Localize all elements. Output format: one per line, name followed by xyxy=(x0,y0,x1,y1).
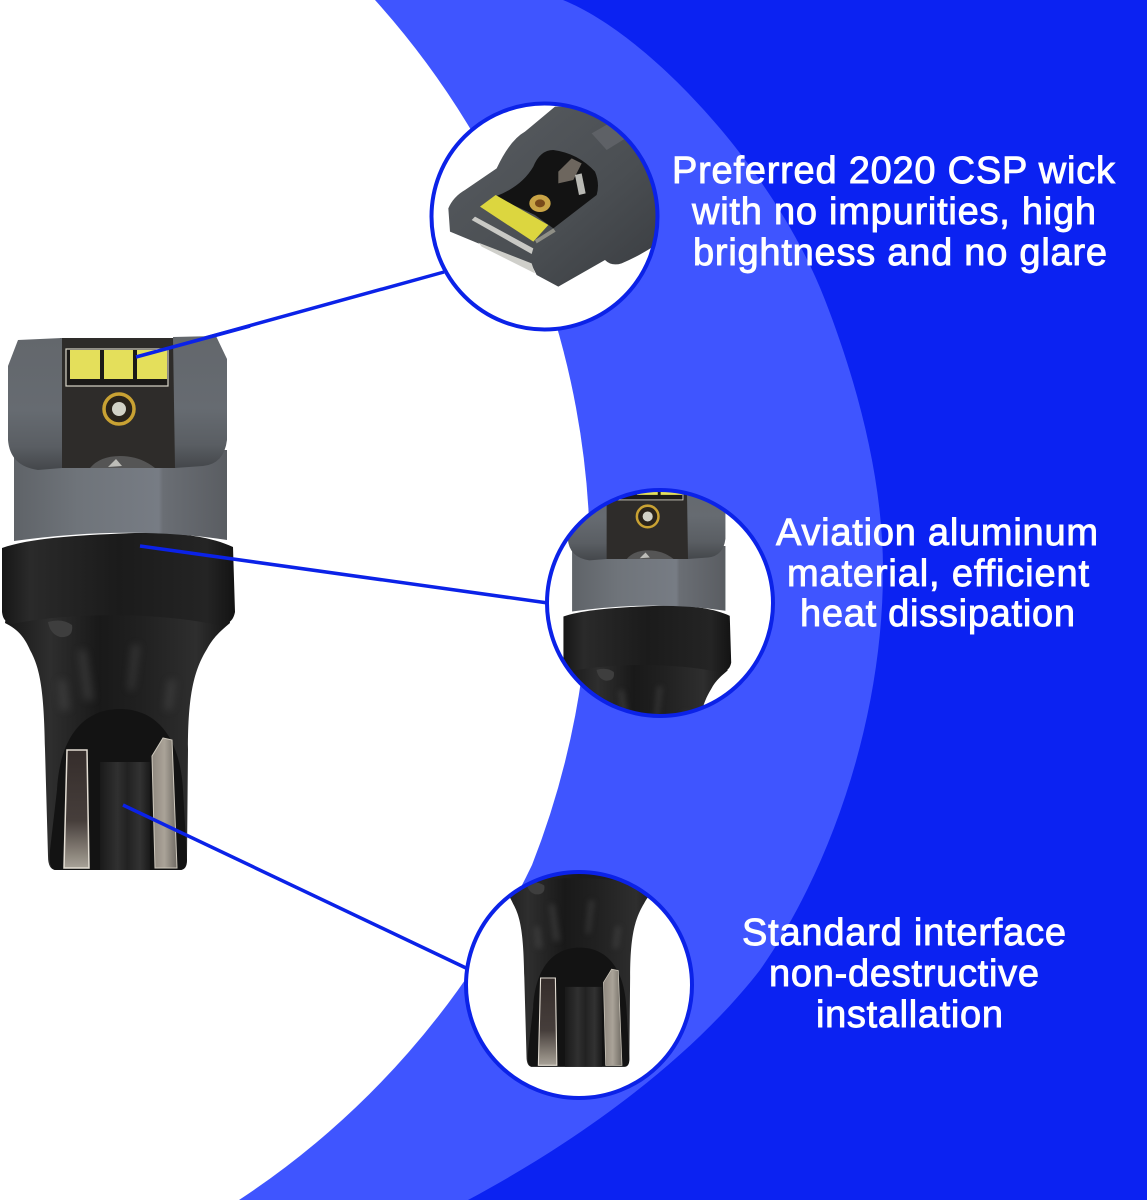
text block: CSP wick: brightness and no glare xyxy=(693,232,1107,274)
callout circle: interface close-up xyxy=(464,870,694,1100)
text block: aviation aluminum: Aviation aluminum xyxy=(776,512,1098,554)
text block: standard interface: non-destructive xyxy=(769,953,1039,995)
text block: CSP wick: Preferred 2020 CSP wick xyxy=(672,150,1116,192)
main bulb photo xyxy=(2,336,235,870)
callout circle: aluminum body close-up xyxy=(545,488,775,718)
text block: standard interface: installation xyxy=(816,994,1003,1036)
callout circle: CSP chip close-up xyxy=(432,104,658,330)
background: light blue curved band xyxy=(0,0,883,1200)
text block: CSP wick xyxy=(672,150,1116,274)
text block: CSP wick: with no impurities, high xyxy=(691,191,1096,233)
leader line: LED chips to first callout xyxy=(136,272,444,357)
text block: standard interface: Standard interface xyxy=(742,912,1066,954)
leader line: LED chips overlay xyxy=(136,326,250,357)
text block: aviation aluminum xyxy=(776,512,1098,635)
text block: aviation aluminum: heat dissipation xyxy=(800,593,1075,635)
leader line: aluminum body to second callout xyxy=(140,546,548,603)
text block: standard interface xyxy=(742,912,1066,1036)
leader line: interface to third callout xyxy=(123,805,466,968)
background: white area xyxy=(0,0,590,1200)
text block: aviation aluminum: material, efficient xyxy=(787,553,1089,595)
